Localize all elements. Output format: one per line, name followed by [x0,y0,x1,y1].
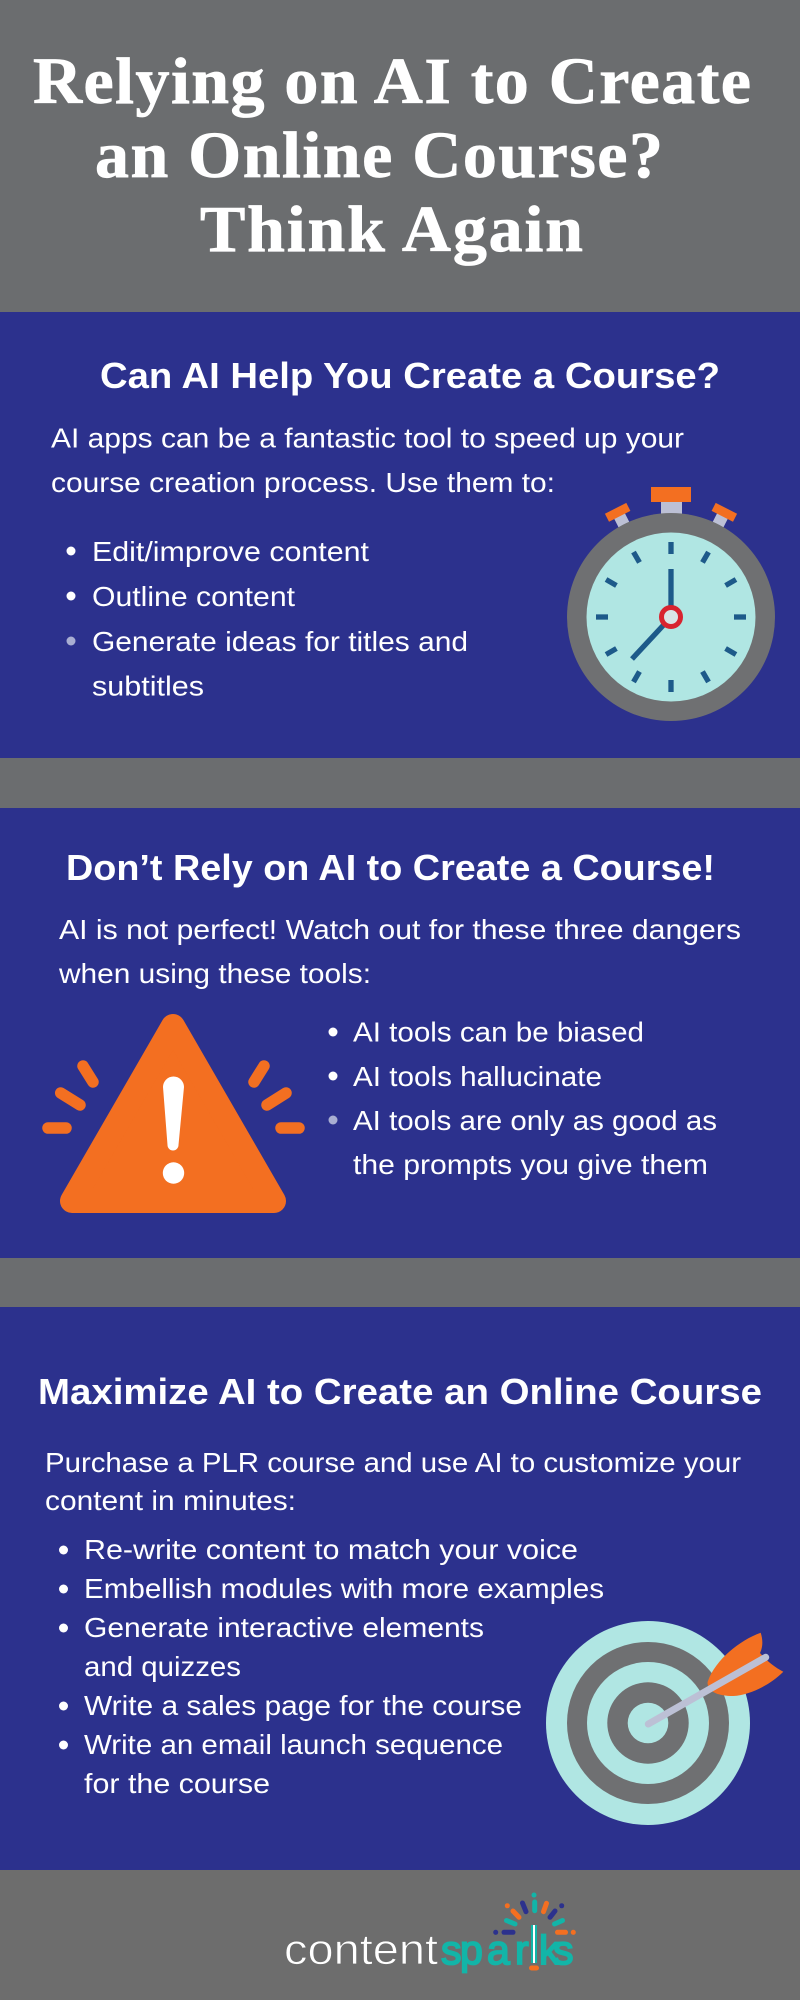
icon: target with arrow [546,1621,783,1825]
bullet list: uses of AI: Generate ideas for titles and [92,626,468,657]
title: an Online Course? [95,120,663,192]
bullet list: dangers [328,1016,717,1180]
logo: contentsparks: content [284,1926,438,1974]
bullet list: customization steps [59,1534,604,1799]
text block: PLR intro: Purchase a PLR course and use AI to customize your [45,1447,741,1478]
bullet list: customization steps: Re-write content to match your voice [84,1534,578,1565]
title: Relying on AI to Create [33,46,751,118]
panel: footer [0,1870,800,2000]
bullet list: dangers: the prompts you give them [353,1149,708,1180]
panel: title header [0,0,800,312]
bullet list: uses of AI: subtitles [92,670,204,702]
heading: don't rely: Don’t Rely on AI to Create a Course! [66,847,715,888]
text block: intro: AI apps can be a fantastic tool to speed up your [51,422,684,454]
divider band [0,1258,800,1307]
heading: maximize AI: Maximize AI to Create an Online Course [38,1371,762,1412]
bullet list: uses of AI: Edit/improve content [92,536,369,567]
title: Think Again [200,194,583,266]
bullet list: customization steps: Generate interactive elements [84,1612,484,1643]
bullet list: customization steps: Write an email launch sequence [84,1729,503,1760]
text block: PLR intro [45,1447,741,1516]
divider band [0,758,800,808]
icon: warning triangle [48,1026,299,1201]
logo: contentsparks: sparks [441,1927,574,1973]
text block: dangers intro: when using these tools: [58,958,371,989]
bullet list: dangers: AI tools can be biased [353,1016,644,1048]
bullet list: uses of AI [66,536,468,702]
bullet list: customization steps: Write a sales page for the course [84,1690,522,1721]
bullet list: uses of AI: Outline content [92,581,295,612]
text block: intro: course creation process. Use them to: [51,467,555,498]
bullet list: customization steps: and quizzes [84,1651,241,1682]
bullet list: customization steps: for the course [84,1768,270,1799]
title [33,46,751,266]
bullet list: dangers: AI tools hallucinate [353,1061,602,1092]
bullet list: dangers: AI tools are only as good as [353,1105,717,1136]
logo: contentsparks [284,1895,574,1974]
panel: don't rely on AI [0,808,800,1258]
panel: maximize AI [0,1307,800,1870]
heading: can AI help: Can AI Help You Create a Course? [100,355,720,396]
text block: intro [51,422,684,498]
panel: can AI help [0,312,800,758]
text block: dangers intro: AI is not perfect! Watch out for these three dangers [59,914,741,945]
icon: stopwatch [567,487,775,721]
bullet list: customization steps: Embellish modules with more examples [84,1573,604,1604]
text block: dangers intro [58,914,741,989]
text block: PLR intro: content in minutes: [45,1485,296,1516]
